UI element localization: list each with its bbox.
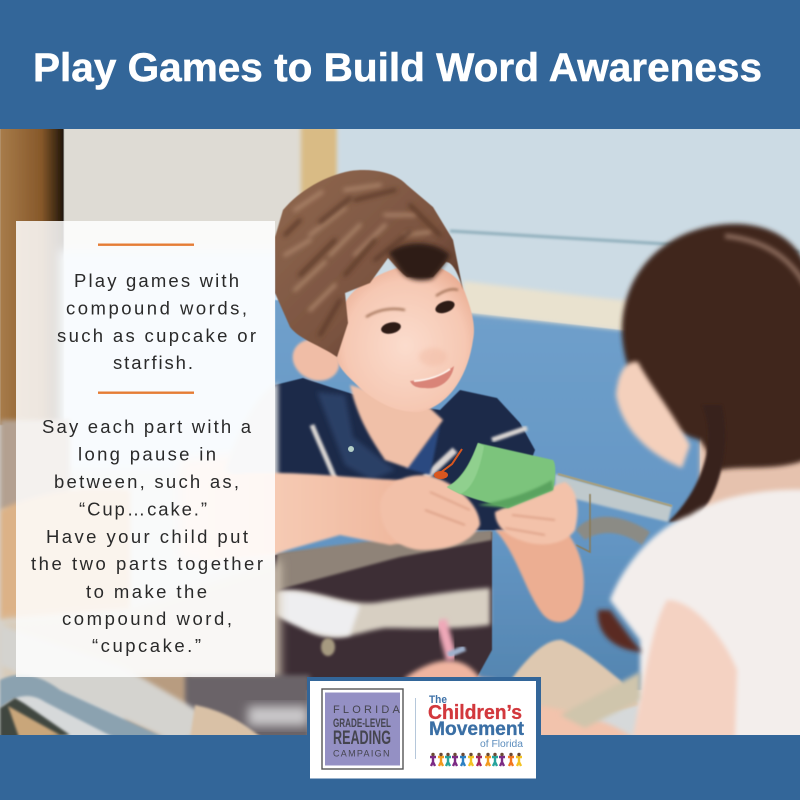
metal rail behind boy's hand <box>555 474 672 552</box>
photo: boy and girl playing at a sand table <box>0 125 800 740</box>
boy: hair <box>275 170 463 357</box>
hair: strand highlights <box>285 185 430 310</box>
boy: shirt <box>275 378 536 531</box>
text block: how to play instructions: between, such as, <box>54 471 239 492</box>
logo: The Children's Movement of Florida: Movement <box>429 719 525 740</box>
girl: body and white shirt <box>536 490 800 740</box>
girl: blurred hand with pink marker <box>402 618 494 677</box>
boy: arms and hands <box>274 471 586 624</box>
logo panel border <box>307 677 541 736</box>
text block: how to play instructions: “Cup…cake.” <box>79 498 207 520</box>
logo panel background <box>310 681 536 778</box>
divider: middle orange rule <box>98 392 194 394</box>
boy: eyes and mouth <box>366 289 458 388</box>
text block: how to play instructions: Have your child put <box>46 526 248 547</box>
sand pile <box>511 638 638 712</box>
text block: how to play instructions: Say each part with a <box>42 416 252 437</box>
text block: how to play instructions <box>31 416 263 656</box>
text block: how to play instructions: compound word, <box>62 608 232 629</box>
bottom band <box>0 735 800 800</box>
text block: compound word suggestion <box>57 270 256 373</box>
panel background <box>16 221 275 677</box>
logo: Florida Grade-Level Reading Campaign: READING <box>333 728 391 749</box>
glass sand table with reflection <box>0 530 492 740</box>
divider: top orange rule <box>98 244 194 246</box>
photo background: wall and door frame <box>0 125 800 735</box>
logo: Florida Grade-Level Reading Campaign <box>322 689 403 769</box>
logo panel <box>307 677 541 778</box>
text block: how to play instructions: the two parts together <box>31 553 263 574</box>
text block: compound word suggestion: such as cupcake or <box>57 325 256 346</box>
logo: The Children's Movement of Florida: The <box>429 694 447 706</box>
text block: compound word suggestion: compound words, <box>66 298 247 318</box>
boy: face <box>337 264 474 412</box>
text block: how to play instructions: “cupcake.” <box>92 635 201 656</box>
boy: neck <box>350 385 443 468</box>
text block: compound word suggestion: Play games with <box>74 270 239 291</box>
text block: how to play instructions: to make the <box>86 581 207 602</box>
logo: The Children's Movement of Florida: of Florida <box>480 739 523 750</box>
text block: how to play instructions: long pause in <box>78 444 216 464</box>
logo: Florida Grade-Level Reading Campaign: FLORIDA <box>333 704 403 716</box>
logo: Florida Grade-Level Reading Campaign: GRADE-LEVEL <box>333 716 391 730</box>
icon: row of paper-doll children <box>430 757 522 766</box>
girl's hair (right side) <box>616 224 800 522</box>
logo: The Children's Movement of Florida: Children’s <box>428 702 522 724</box>
green sponge toy <box>434 443 555 508</box>
logo: Florida Grade-Level Reading Campaign: CAMPAIGN <box>333 748 391 758</box>
title: Play Games to Build Word Awareness <box>33 46 762 90</box>
top title band <box>0 0 800 129</box>
boy: ear <box>291 339 340 382</box>
logo: The Children's Movement of Florida <box>428 694 525 766</box>
logo divider <box>415 698 416 759</box>
text block: compound word suggestion: starfish. <box>113 352 193 373</box>
panel: tip text <box>16 221 275 677</box>
